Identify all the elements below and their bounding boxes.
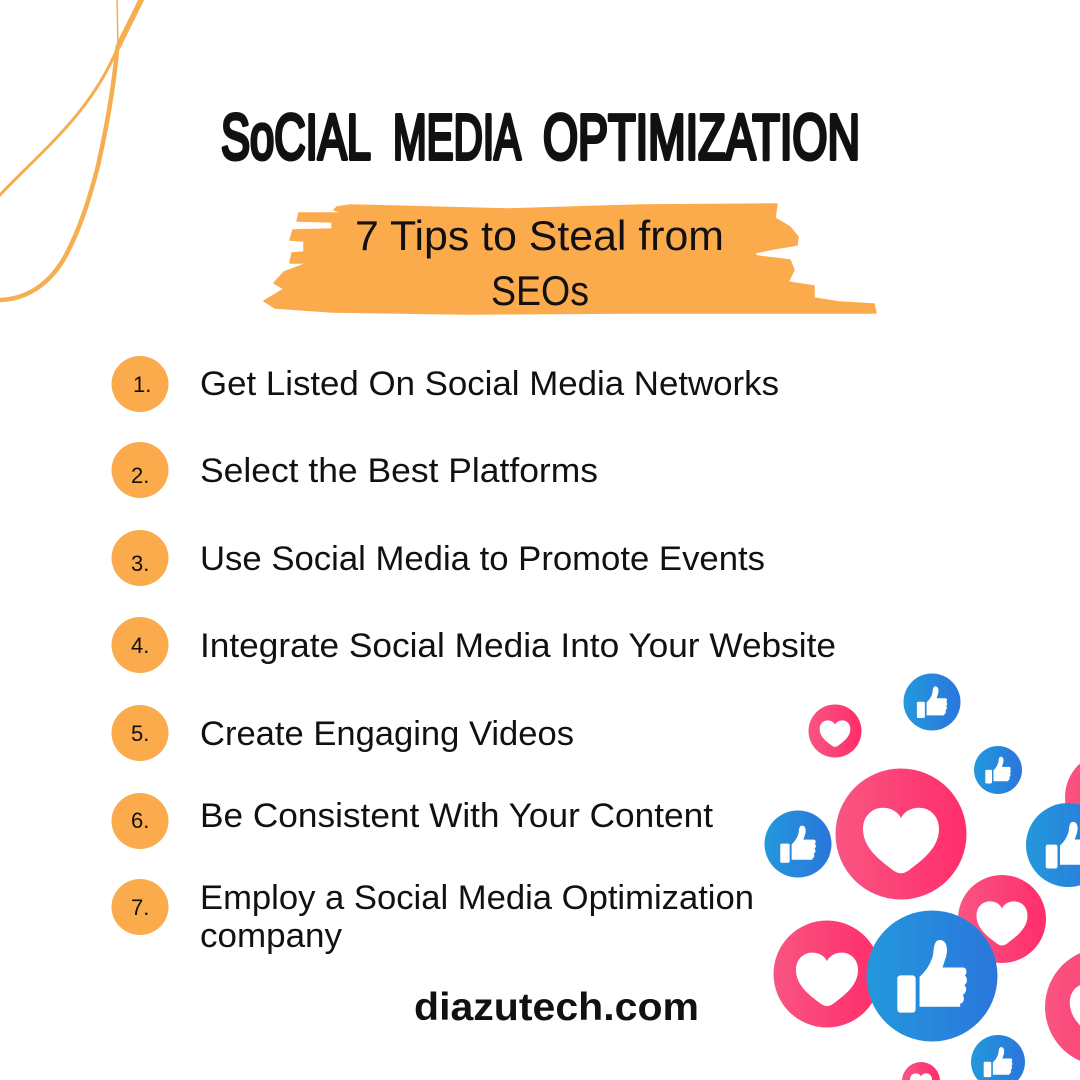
icon: clipped heart right [1065,752,1080,842]
tip 1: Get Listed On Social Media Networks [200,365,779,403]
decorative orange curves [0,0,142,300]
subtitle text [355,212,724,314]
tip list [112,356,836,955]
icon: big heart [836,768,966,900]
icon: small thumb right [974,746,1022,794]
tip 5: Create Engaging Videos [200,715,574,753]
tip 7 [112,879,754,955]
tip 4: 4. [131,633,149,658]
tip 7: Employ a Social Media Optimization [200,879,754,917]
icon: clipped thumb right [1026,803,1080,887]
title: OPTIMIZATION [543,101,860,173]
icon: thumb left [764,810,832,878]
tip 3 [112,530,765,586]
website url: diazutech.com [414,986,699,1029]
subtitle banner [264,204,876,314]
tip 3: 3. [131,551,149,576]
tip 2 [112,442,598,498]
tip 4 [112,617,836,673]
icon: big thumb [866,910,998,1042]
tip 6: 6. [131,808,149,833]
tip 6 [112,793,714,849]
icon: thumb top [904,674,960,730]
tip 3: Use Social Media to Promote Events [200,540,765,578]
icon: bottom thumb [971,1035,1025,1080]
tip 4: Integrate Social Media Into Your Website [200,627,836,665]
brush stroke [264,204,876,314]
title: SoCIAL [221,101,371,173]
tip 1 [112,356,779,412]
tip 1: 1. [133,372,151,397]
icon: mid heart [958,875,1046,963]
tip 2: Select the Best Platforms [200,452,598,490]
title: MEDIA [393,101,521,173]
icon: left heart [774,920,880,1028]
icon: clipped heart bottom right [1045,948,1080,1066]
tip 6: Be Consistent With Your Content [200,797,714,835]
tip 5 [112,705,574,761]
social reaction icons [764,674,1080,1080]
title [221,101,860,173]
subtitle text: SEOs [491,267,589,314]
tip 7: company [200,917,342,955]
subtitle text: 7 Tips to Steal from [355,212,724,259]
tip 2: 2. [131,463,149,488]
icon: small heart [808,704,862,758]
tip 5: 5. [131,721,149,746]
icon: bottom heart [902,1062,940,1080]
tip 7: 7. [131,895,149,920]
